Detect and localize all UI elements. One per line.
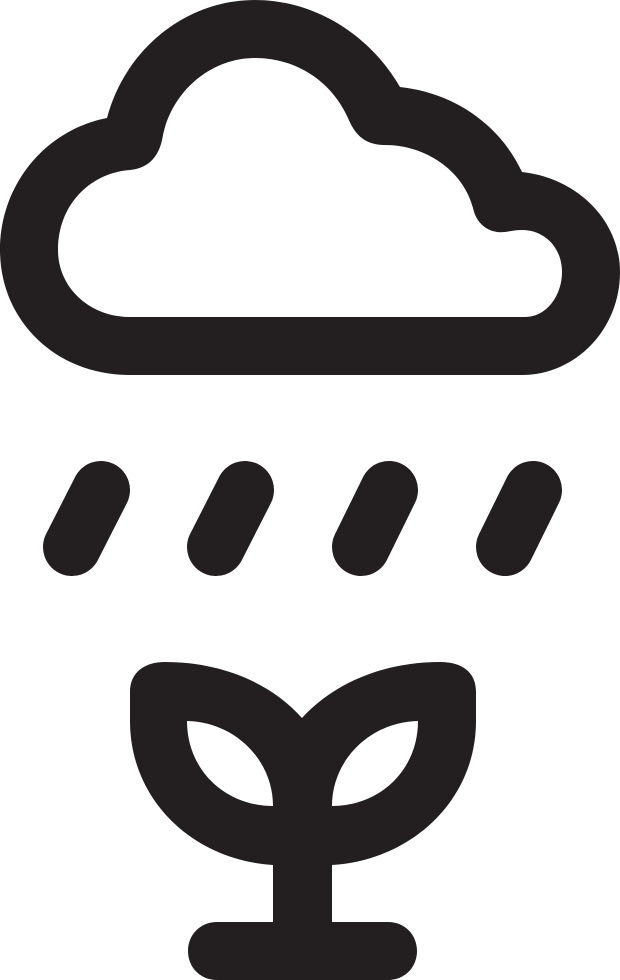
icon: cloud outline	[0, 0, 620, 375]
icon: sprout	[130, 662, 476, 980]
icon: rain drops	[72, 490, 533, 547]
